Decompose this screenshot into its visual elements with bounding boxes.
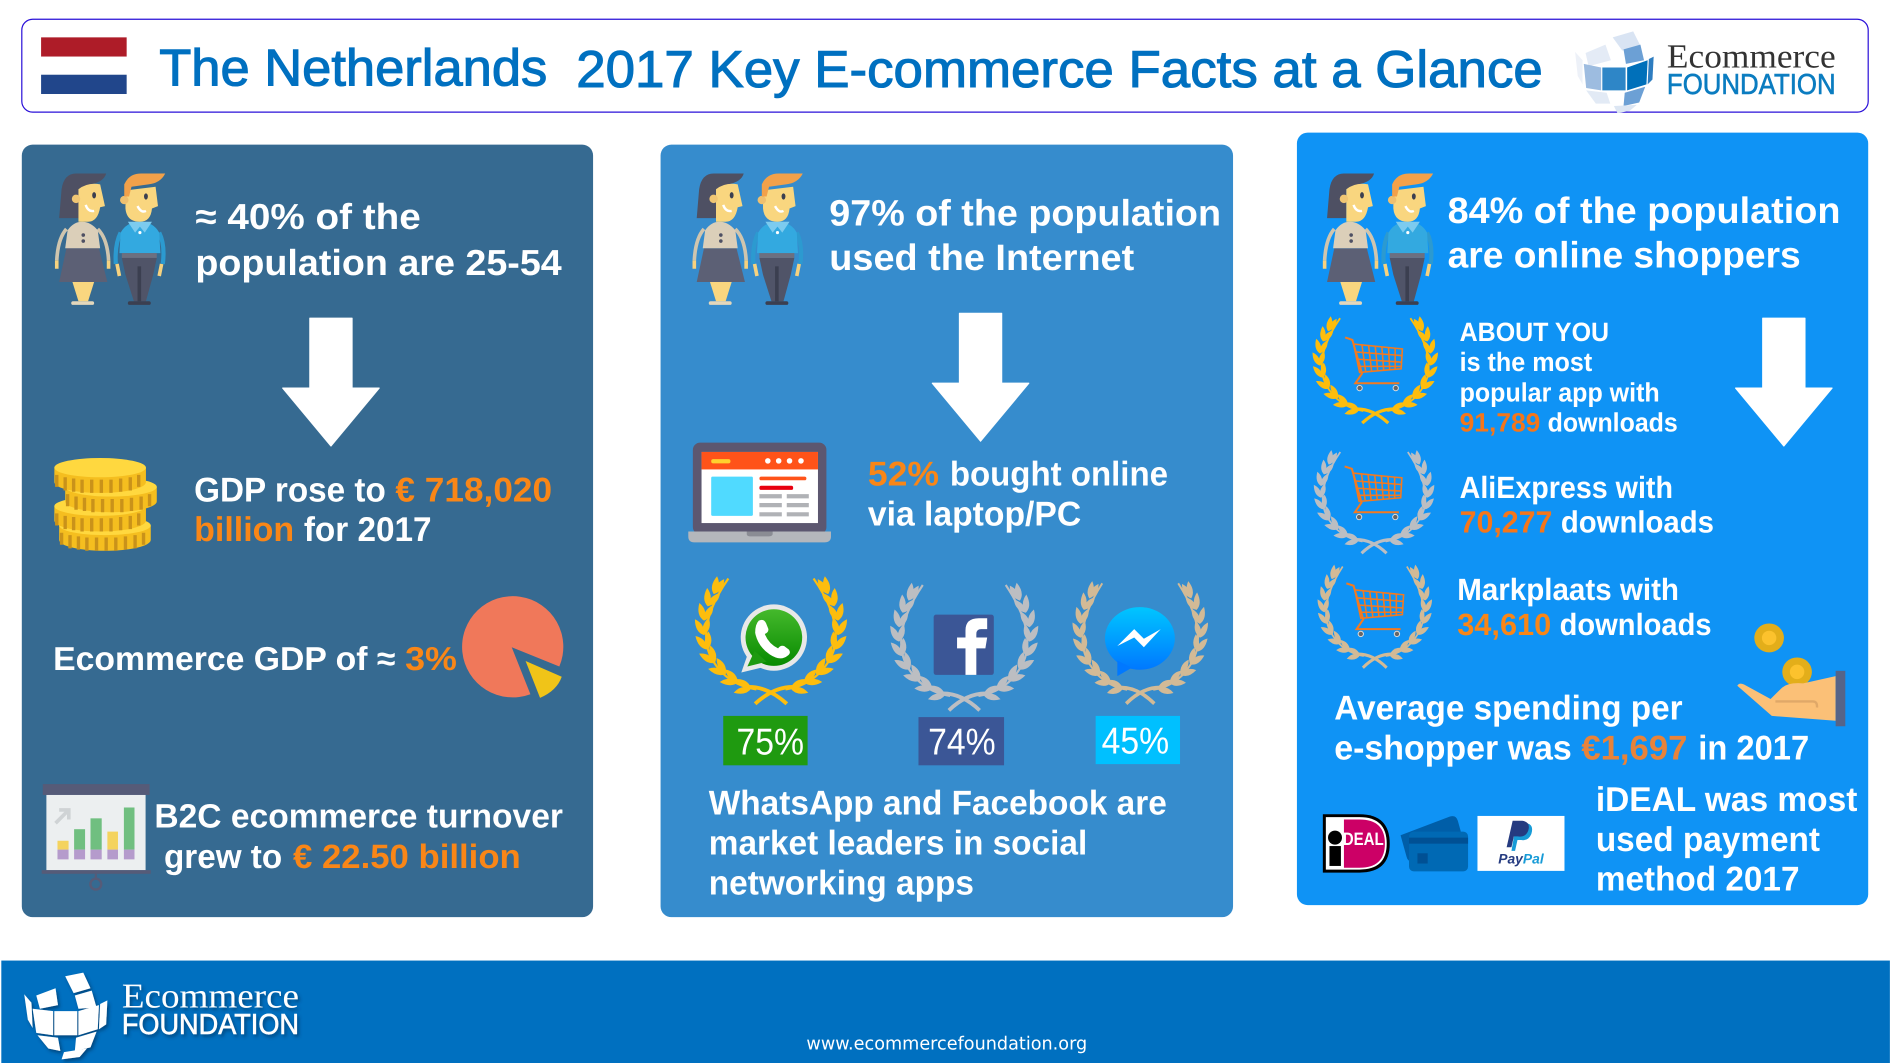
text: social networking apps: networking apps [709, 864, 974, 903]
text: average spending: €1,697 [1581, 729, 1687, 768]
text: iDEAL payment [1596, 781, 1858, 899]
footer band [1, 961, 1890, 1063]
icon: coins [54, 458, 157, 551]
panel: internet use [661, 145, 1233, 917]
arrow: down [1736, 318, 1832, 446]
icon: Messenger in bronze wreath [1071, 581, 1210, 704]
heading: country: The Netherlands [159, 40, 547, 98]
text: About You: ABOUT YOU [1460, 317, 1609, 347]
text: GDP: € 718,020 [395, 471, 552, 510]
text: laptop share: 52% [868, 456, 939, 494]
text: AliExpress: downloads [1561, 506, 1714, 540]
icon: laptop [688, 443, 831, 542]
panel: economy [22, 145, 593, 917]
text: About You: downloads [1548, 407, 1678, 437]
text: Markplaats: downloads [1560, 609, 1712, 642]
text: ecommerce GDP: 3% [405, 640, 457, 677]
text: iDEAL payment: iDEAL was most [1596, 781, 1858, 820]
text: internet use [829, 193, 1221, 278]
text: average spending: Average spending per [1334, 689, 1683, 728]
text: B2C turnover: grew to [164, 838, 282, 875]
text: laptop share: bought online [950, 456, 1168, 494]
icon: hand with coins [1737, 623, 1845, 726]
text: GDP: for 2017 [304, 511, 432, 550]
logo: Ecommerce Foundation footer: Ecommerce [122, 977, 299, 1016]
text: social networking apps: WhatsApp and Facebook are [709, 785, 1167, 823]
icon: people [694, 174, 803, 305]
text: GDP: billion [194, 511, 294, 550]
text: About You: is the most [1460, 347, 1593, 377]
text: AliExpress: AliExpress with [1460, 471, 1673, 505]
text: About You: popular app with [1460, 377, 1660, 407]
icon: WhatsApp in gold wreath [693, 576, 849, 704]
text: online shoppers: are online shoppers [1448, 235, 1801, 276]
text: B2C turnover: B2C ecommerce turnover [154, 797, 563, 835]
text: iDEAL payment: method 2017 [1596, 861, 1799, 899]
text: average spending: e-shopper was [1334, 729, 1572, 768]
chart: pie 3 percent [462, 596, 563, 698]
text: laptop share [868, 456, 1168, 534]
badge: WhatsApp share [723, 716, 808, 765]
logo: Ecommerce Foundation header: FOUNDATION [1667, 69, 1836, 101]
text: internet use: used the Internet [829, 237, 1134, 278]
text: population age: population are 25-54 [195, 243, 562, 283]
logo: Ecommerce Foundation header [1575, 31, 1836, 113]
text: website: www.ecommercefoundation.org [806, 1033, 1087, 1055]
text: Markplaats [1457, 574, 1712, 642]
icon: bronze cart wreath [1316, 564, 1433, 668]
text: social networking apps: market leaders in social [709, 824, 1087, 863]
badge: WhatsApp share: 75% [736, 721, 804, 763]
text: GDP: GDP rose to [194, 471, 386, 510]
icon: Dutch flag [41, 37, 127, 94]
icon: bank card [1401, 816, 1468, 871]
icon: PayPal logo: PayPal [1498, 853, 1545, 867]
icon: Facebook in silver wreath [888, 582, 1040, 710]
text: population age [195, 198, 562, 283]
badge: Facebook share: 74% [928, 721, 996, 763]
icon: iDEAL logo [1323, 814, 1390, 873]
text: iDEAL payment: used payment [1596, 821, 1821, 859]
title bar [22, 19, 1868, 113]
text: average spending [1334, 689, 1809, 768]
heading: subject: 2017 Key E-commerce Facts at a Glance [576, 41, 1543, 99]
text: About You: 91,789 [1460, 407, 1540, 437]
text: social networking apps [709, 785, 1167, 903]
icon: iDEAL logo: DEAL [1343, 829, 1384, 850]
text: laptop share: via laptop/PC [868, 495, 1081, 534]
logo: Ecommerce Foundation footer [24, 973, 299, 1059]
text: B2C turnover [154, 797, 563, 875]
icon: presentation chart [42, 784, 151, 890]
text: internet use: 97% of the population [829, 193, 1221, 234]
icon: people [57, 174, 165, 305]
text: Markplaats: 34,610 [1457, 609, 1551, 642]
text: GDP [194, 471, 552, 550]
logo: Ecommerce Foundation footer: FOUNDATION [122, 1009, 299, 1041]
text: population age: ≈ 40% of the [195, 198, 421, 237]
text: About You [1460, 317, 1678, 437]
logo: Ecommerce Foundation header: Ecommerce [1667, 39, 1836, 76]
panel: online shoppers [1297, 133, 1868, 905]
text: Markplaats: Markplaats with [1457, 574, 1679, 607]
text: ecommerce GDP: Ecommerce GDP of ≈ [53, 640, 395, 677]
text: AliExpress: 70,277 [1460, 506, 1552, 540]
text: AliExpress [1460, 471, 1714, 540]
icon: PayPal logo [1477, 816, 1564, 871]
text: online shoppers [1448, 190, 1840, 276]
text: online shoppers: 84% of the population [1448, 190, 1840, 231]
icon: people [1325, 174, 1433, 305]
arrow: down [932, 313, 1029, 441]
text: average spending: in 2017 [1698, 729, 1809, 768]
badge: Messenger share: 45% [1102, 720, 1169, 762]
text: B2C turnover: € 22.50 billion [293, 838, 521, 875]
arrow: down [283, 318, 379, 446]
icon: gold cart wreath [1311, 316, 1439, 423]
icon: silver cart wreath [1312, 450, 1436, 553]
